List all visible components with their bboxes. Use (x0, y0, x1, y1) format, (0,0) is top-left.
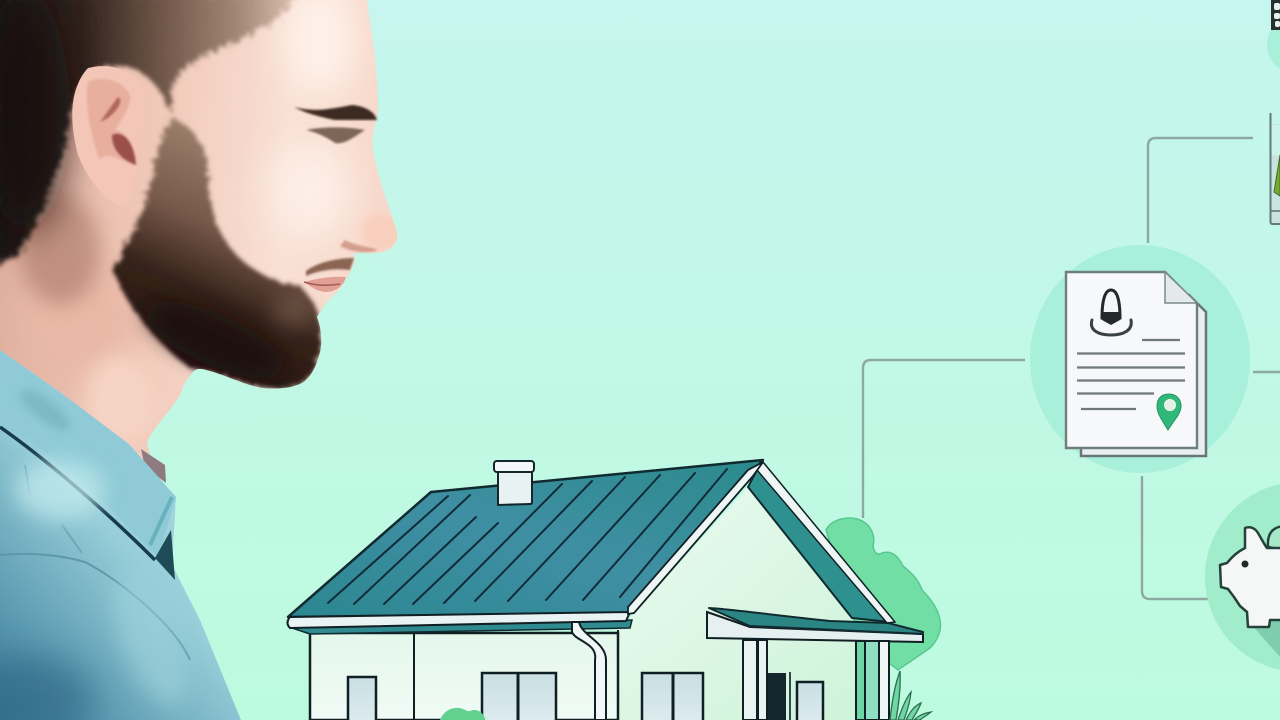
neck shadow (20, 195, 100, 305)
piggy body (1220, 527, 1280, 627)
shirt dark inner neck (155, 530, 175, 580)
grass tuft (890, 671, 931, 720)
icon: document with bell and map pin (1030, 245, 1250, 473)
ear (72, 66, 146, 206)
folded corner (1165, 272, 1197, 303)
icon: partially visible card with tree (1270, 113, 1280, 224)
porch canopy (707, 608, 923, 642)
main wall (310, 633, 618, 720)
nostril shading (340, 240, 378, 252)
bush behind house (826, 518, 941, 670)
lips (304, 277, 346, 292)
collar (0, 350, 176, 558)
map pin (1157, 394, 1181, 430)
side gable wall (618, 487, 880, 720)
house illustration (288, 460, 941, 720)
circle behind piggy bank (1205, 482, 1280, 672)
porch window (797, 682, 823, 720)
shirt inner collar (141, 449, 166, 483)
face highlights (268, 140, 352, 240)
circle behind document (1030, 245, 1250, 473)
bell symbol (1091, 290, 1131, 335)
head and neck (0, 0, 402, 500)
piggy bank shadow (1255, 621, 1280, 657)
coin (1268, 526, 1280, 550)
connector lines between icons (863, 138, 1280, 599)
eye (306, 127, 365, 143)
piggy eye (1242, 560, 1248, 568)
man in profile (0, 0, 402, 720)
eyebrow (294, 105, 377, 120)
downspout (572, 622, 606, 720)
front sheet (1066, 272, 1197, 448)
small shrub (439, 708, 486, 720)
eave and gutter (288, 612, 632, 634)
document text lines (1077, 340, 1185, 409)
right rake with teal fascia (628, 462, 895, 623)
wall edge (617, 630, 619, 720)
mustache (306, 258, 354, 276)
beard (113, 118, 322, 389)
middle window (482, 673, 556, 720)
shirt (0, 350, 241, 720)
icon: piggy bank (1205, 482, 1280, 680)
door (768, 673, 786, 720)
back sheet (1081, 296, 1206, 456)
chimney (494, 461, 534, 505)
icon fragment: top right dark badge (1271, 0, 1280, 30)
door frame (789, 672, 791, 720)
right window (642, 673, 703, 720)
porch left columns (743, 640, 767, 720)
porch right columns (856, 641, 889, 720)
hair (0, 0, 296, 265)
left window (348, 677, 376, 720)
roof (288, 460, 763, 617)
icon circle: top right (1267, 0, 1280, 74)
